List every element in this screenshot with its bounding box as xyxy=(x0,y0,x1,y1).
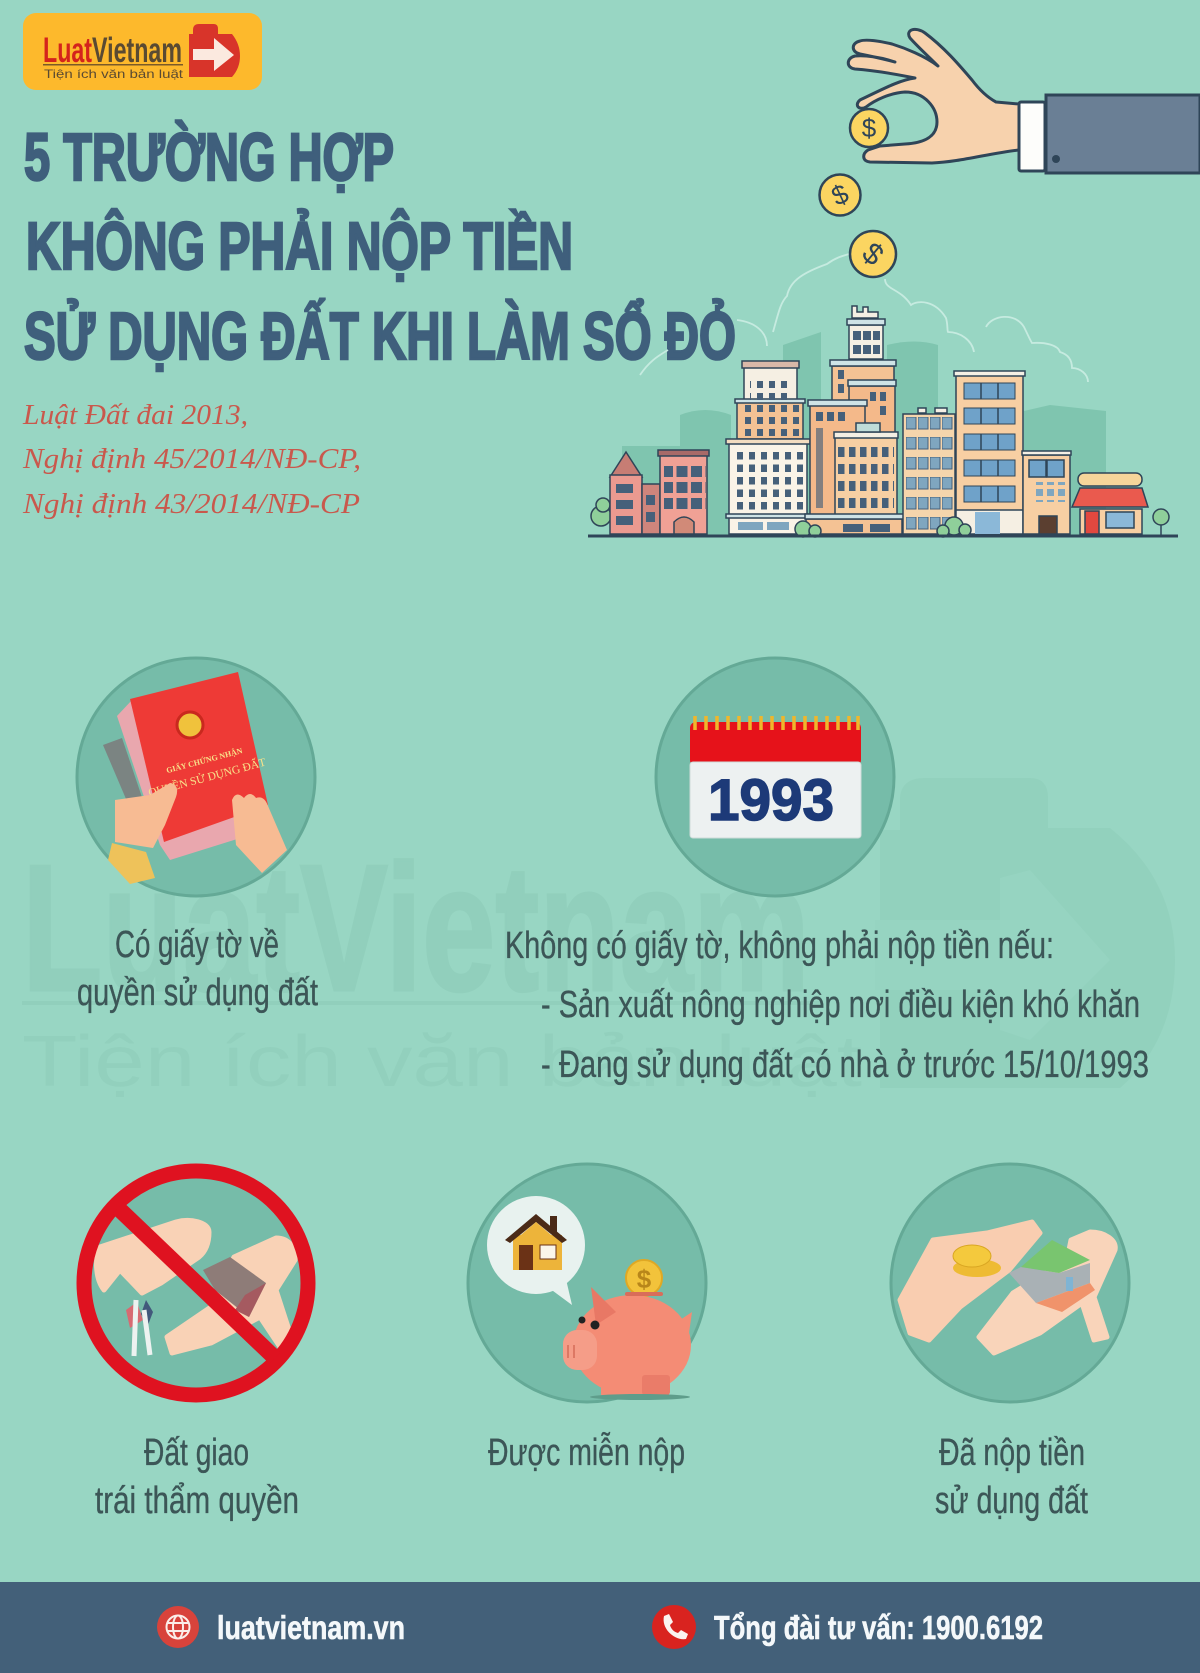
caption: quyền sử dụng đất xyxy=(77,972,318,1014)
house group xyxy=(591,450,709,534)
icon: piggy bank with house bubble xyxy=(468,1164,706,1402)
watermark: LuatVietnam logo: LuatVietnam xyxy=(22,828,810,1029)
white and peach tower xyxy=(726,361,810,534)
icon: hands exchanging coins and house xyxy=(891,1164,1129,1402)
panel: exempted xyxy=(468,1164,706,1474)
panel: has land-use papers xyxy=(77,658,318,1014)
caption: Được miễn nộp xyxy=(488,1431,685,1474)
title: KHÔNG PHẢI NỘP TIỀN xyxy=(26,209,573,284)
grid building xyxy=(903,408,955,534)
caption xyxy=(935,1432,1088,1522)
legal references: Nghị định 43/2014/NĐ-CP xyxy=(22,488,360,520)
icon: red certificate book: QUYỀN SỬ DỤNG ĐẤT xyxy=(146,754,267,800)
caption: sử dụng đất xyxy=(935,1480,1088,1522)
icon: red certificate book: GIẤY CHỨNG NHẬN xyxy=(165,745,244,775)
panel: no papers, still exempt xyxy=(505,658,1149,1086)
caption xyxy=(77,924,318,1014)
hotline: Tổng đài tư vấn: 1900.6192 xyxy=(714,1609,1043,1646)
coin 1 xyxy=(850,109,888,147)
legal references: Nghị định 45/2014/NĐ-CP, xyxy=(22,443,361,475)
icon: prohibited key and house handover xyxy=(84,1171,308,1395)
icon: globe xyxy=(157,1606,199,1648)
coin 2 xyxy=(820,174,860,216)
icon: 1993 calendar xyxy=(656,658,894,896)
low building xyxy=(1022,451,1071,534)
trees and bushes xyxy=(795,509,1169,537)
caption: trái thẩm quyền xyxy=(95,1480,299,1522)
title: SỬ DỤNG ĐẤT KHI LÀM SỔ ĐỎ xyxy=(24,299,736,374)
title: 5 TRƯỜNG HỢP xyxy=(24,120,394,195)
panel: land allocated without authority xyxy=(84,1171,308,1522)
caption xyxy=(505,925,1149,1086)
caption: Đất giao xyxy=(144,1432,249,1474)
coin 2: $ xyxy=(827,178,853,212)
icon: 1993 calendar: 1993 xyxy=(708,768,834,833)
illustration: city skyline xyxy=(588,254,1178,538)
coin 3 xyxy=(850,231,896,277)
website: luatvietnam.vn xyxy=(217,1609,405,1646)
icon: red certificate book xyxy=(77,658,315,896)
legal references: Luật Đất đai 2013, xyxy=(22,399,248,431)
illustration: hand dropping coins xyxy=(820,29,1200,277)
title xyxy=(24,120,736,374)
icon: phone xyxy=(652,1605,696,1649)
watermark: LuatVietnam logo xyxy=(22,778,1175,1102)
footer bar xyxy=(0,1582,1200,1673)
legal references xyxy=(22,399,361,520)
logo xyxy=(23,13,262,90)
logo: LuatVietnam xyxy=(43,31,182,70)
coin 3: $ xyxy=(856,236,890,273)
caption xyxy=(95,1432,299,1522)
caption: Đã nộp tiền xyxy=(939,1432,1085,1474)
central tower xyxy=(805,306,904,534)
shop xyxy=(1072,473,1148,534)
caption: Có giấy tờ về xyxy=(115,924,279,966)
watermark: LuatVietnam logo: Tiện ích văn bản luật xyxy=(22,1022,862,1102)
logo: Tiện ích văn bản luật xyxy=(44,67,184,81)
panel: already paid xyxy=(891,1164,1129,1522)
coin 1: $ xyxy=(862,113,877,143)
icon: piggy bank with house bubble: $ xyxy=(637,1264,652,1294)
blue-window tower xyxy=(954,371,1025,534)
